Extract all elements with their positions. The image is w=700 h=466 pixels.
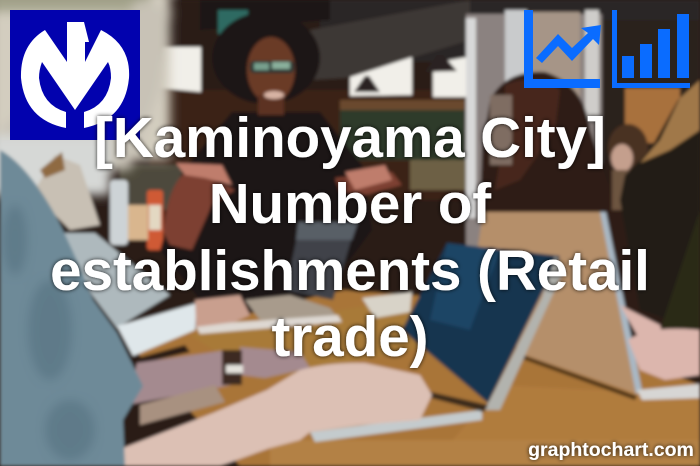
background woman: [608, 124, 648, 210]
title: establishments (Retail: [50, 239, 650, 302]
grey shirt behind sleeve: [60, 233, 170, 328]
icon: line chart with rising arrow: [524, 10, 601, 88]
white paper: [362, 292, 412, 318]
beige laptop back: [470, 212, 637, 394]
icon: bar chart: [612, 10, 690, 88]
woman standing: hands: [176, 163, 392, 190]
woman standing: face: [247, 37, 295, 115]
hand on left laptop: [195, 295, 250, 327]
left laptop: [195, 222, 358, 334]
bottles: [110, 180, 163, 250]
woman standing: shirt: [160, 112, 372, 310]
bag on shelf: [35, 155, 100, 230]
title: trade): [272, 305, 428, 368]
right woman in black jacket: [620, 80, 700, 335]
title: Number of: [209, 172, 491, 235]
watch: [222, 350, 242, 385]
sleeve white: [117, 303, 197, 356]
shadow gap below sleeve: [137, 345, 190, 364]
sweater: [0, 150, 143, 466]
dark blue laptop screen: [402, 243, 560, 403]
beige laptop edge and base: [600, 212, 700, 400]
pale left blur: [0, 0, 172, 195]
ceiling: [200, 0, 700, 80]
woman standing: hair: [212, 12, 320, 104]
dark right background and wood panel: [602, 20, 700, 160]
cream strip under arm: [140, 385, 225, 425]
green sign: [218, 10, 248, 34]
logo: Kaminoyama city emblem: [10, 10, 140, 140]
back wall and shelves: [120, 90, 470, 210]
woman standing: arms: [163, 172, 402, 250]
title: [50, 106, 650, 368]
long-haired woman: [480, 72, 660, 320]
metal column: [466, 10, 602, 254]
table: [130, 290, 700, 466]
dark laptop bezel and base: [310, 256, 564, 442]
front arm and hand: [123, 363, 432, 466]
bright windows: [147, 47, 467, 97]
hanging lamps: [354, 55, 457, 92]
right hands: [620, 305, 700, 380]
title: [Kaminoyama City]: [94, 106, 606, 169]
site credit: graphtochart.com: [528, 439, 694, 461]
arm and hand middle: [127, 347, 310, 405]
